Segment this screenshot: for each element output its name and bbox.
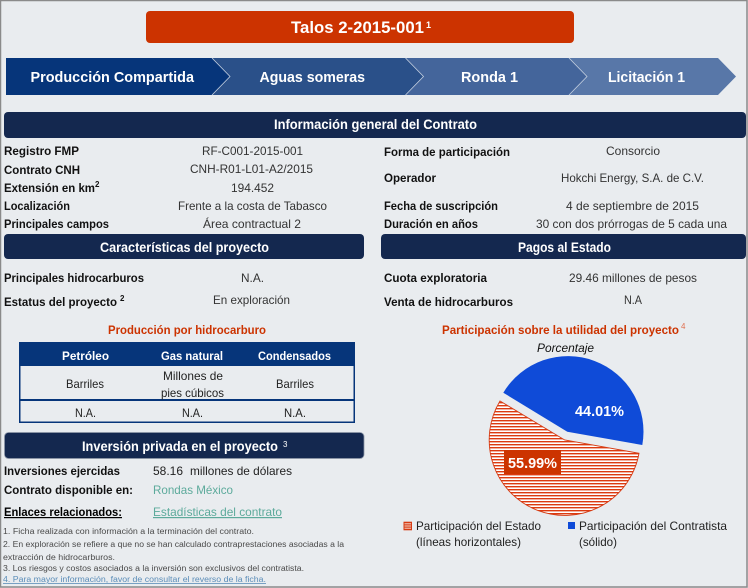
row: Enlaces relacionados: Enlaces relacionados: (4, 505, 122, 519)
chevron: Producción Compartida (6, 58, 230, 95)
legend item: Participación del Contratista: Participación del Contratista (579, 519, 727, 533)
slice: Participación del Contratista 44.01% (503, 356, 643, 445)
heading: Características del proyecto: Características del proyecto (100, 239, 269, 255)
legend item: Participación del Contratista: (sólido) (579, 535, 617, 549)
panel: investment details (4, 464, 292, 519)
legend item: Participación del Contratista (568, 519, 727, 549)
chevron: Ronda 1: Ronda 1 (461, 69, 518, 86)
heading: Información general del Contrato: Información general del Contrato (274, 116, 477, 132)
panel: project characteristics (4, 271, 290, 309)
heading: Producción por hidrocarburo: Producción por hidrocarburo (108, 323, 266, 337)
title (146, 11, 574, 43)
row: Principales hidrocarburos: N.A. (241, 271, 264, 285)
row: Estatus del proyecto: En exploración (213, 293, 290, 307)
table: production by hydrocarbon: N.A. (75, 406, 96, 420)
row: Estatus del proyecto: Estatus del proyecto (4, 295, 117, 309)
title: 1 (426, 20, 431, 30)
label: 55.99%: 55.99% (508, 455, 557, 472)
legend (404, 519, 727, 549)
chevron: Licitación 1: Licitación 1 (608, 69, 685, 86)
row: Operador: Operador (384, 171, 436, 185)
row: Duración en años: 30 con dos prórrogas de 5 cada una (536, 217, 727, 231)
heading: Información general del Contrato (4, 112, 746, 138)
row: Estatus del proyecto: 2 (120, 294, 125, 303)
legend item: Participación del Estado (404, 519, 541, 549)
table: production by hydrocarbon: Millones de (163, 369, 223, 383)
legend item: Participación del Estado: (líneas horizontales) (416, 535, 521, 549)
pie chart (489, 356, 643, 515)
row: Cuota exploratoria: Cuota exploratoria (384, 271, 487, 285)
row: Inversiones ejercidas: Inversiones ejercidas (4, 464, 120, 478)
heading: Inversión privada en el proyecto (4, 432, 364, 458)
row: Extensión en km2: 194.452 (231, 181, 274, 195)
heading: Participación sobre la utilidad del proyecto: 4 (681, 322, 686, 331)
row: Localización: Localización (4, 199, 70, 213)
footnotes: extracción de hidrocarburos. (3, 553, 115, 562)
table: production by hydrocarbon: Barriles (66, 377, 104, 391)
row: Contrato CNH: CNH-R01-L01-A2/2015 (190, 162, 313, 176)
row: Enlaces relacionados: Estadísticas del contrato (153, 505, 282, 519)
label: 44.01%: 44.01% (575, 403, 624, 420)
label: 55.99% (504, 450, 561, 474)
row: Estatus del proyecto (4, 293, 290, 309)
row: Contrato disponible en: Rondas México (153, 483, 233, 497)
panel: state payments (384, 271, 697, 309)
heading: Pagos al Estado (381, 234, 746, 259)
heading: Pagos al Estado: Pagos al Estado (518, 239, 611, 255)
chevron: Producción Compartida: Producción Compartida (30, 69, 195, 86)
footnotes: 4. Para mayor información, favor de consultar el reverso de la ficha. (3, 575, 266, 584)
row: Inversiones ejercidas: millones de dólares (190, 464, 292, 478)
row: Extensión en km2 (4, 180, 274, 195)
chevron: Aguas someras (212, 58, 424, 95)
row: Duración en años (384, 217, 727, 231)
row: Forma de participación: Forma de participación (384, 145, 510, 159)
title: Talos 2-2015-001 (291, 18, 424, 37)
chevron process bar (6, 58, 736, 95)
row: Extensión en km2: 2 (95, 180, 100, 189)
row: Operador: Hokchi Energy, S.A. de C.V. (561, 171, 704, 185)
row: Registro FMP (4, 144, 303, 158)
row: Principales campos (4, 216, 301, 231)
row: Fecha de suscripción (384, 199, 699, 213)
heading: Participación sobre la utilidad del proyecto: Participación sobre la utilidad del proyecto (442, 323, 679, 337)
chevron: Ronda 1 (406, 58, 587, 95)
row: Venta de hidrocarburos: Venta de hidrocarburos (384, 295, 513, 309)
row: Enlaces relacionados (4, 505, 282, 519)
footnotes: 2. En exploración se refiere a que no se han calculado contraprestaciones asociadas a la (3, 540, 345, 549)
table: production by hydrocarbon: pies cúbicos (161, 386, 224, 400)
heading: Características del proyecto (4, 234, 364, 259)
footnotes: 3. Los riesgos y costos asociados a la inversión son exclusivos del contratista. (3, 564, 304, 573)
row: Registro FMP: Registro FMP (4, 144, 79, 158)
heading: Inversión privada en el proyecto: Inversión privada en el proyecto (82, 438, 278, 454)
chevron: Aguas someras: Aguas someras (260, 69, 365, 86)
slice: Participación del Estado 55.99% (489, 401, 639, 515)
chevron: Licitación 1 (569, 58, 736, 95)
chart subtitle: Porcentaje: Porcentaje (537, 341, 594, 355)
row: Inversiones ejercidas: 58.16 (153, 464, 183, 478)
panel: contract info right (384, 144, 727, 231)
row: Fecha de suscripción: Fecha de suscripción (384, 199, 498, 213)
panel: contract info left (4, 144, 327, 231)
row: Contrato disponible en (4, 483, 233, 497)
footnotes (3, 527, 345, 584)
row: Operador (384, 171, 704, 185)
heading: Inversión privada en el proyecto: 3 (283, 440, 288, 449)
row: Inversiones ejercidas (4, 464, 292, 478)
table: production by hydrocarbon: Petróleo (62, 349, 109, 363)
table: production by hydrocarbon: Gas natural (161, 349, 223, 363)
row: Venta de hidrocarburos (384, 293, 642, 309)
row: Registro FMP: RF-C001-2015-001 (202, 144, 303, 158)
row: Contrato CNH (4, 162, 313, 177)
row: Principales campos: Área contractual 2 (203, 216, 301, 231)
table: production by hydrocarbon: N.A. (284, 406, 306, 420)
row: Forma de participación: Consorcio (606, 144, 660, 158)
row: Principales hidrocarburos (4, 271, 264, 285)
row: Cuota exploratoria: 29.46 millones de pesos (569, 271, 697, 285)
row: Extensión en km2: Extensión en km (4, 181, 95, 195)
row: Venta de hidrocarburos: N.A (624, 293, 642, 307)
row: Forma de participación (384, 144, 660, 159)
row: Contrato CNH: Contrato CNH (4, 163, 80, 177)
legend item: Participación del Estado: Participación del Estado (416, 519, 541, 533)
row: Localización: Frente a la costa de Tabasco (178, 199, 327, 213)
row: Cuota exploratoria (384, 271, 697, 285)
table: production by hydrocarbon (19, 342, 355, 422)
table: production by hydrocarbon: N.A. (182, 406, 203, 420)
row: Principales campos: Principales campos (4, 217, 109, 231)
table: production by hydrocarbon: Condensados (258, 349, 331, 363)
row: Principales hidrocarburos: Principales hidrocarburos (4, 271, 144, 285)
row: Duración en años: Duración en años (384, 217, 478, 231)
footnotes: 1. Ficha realizada con información a la terminación del contrato. (3, 527, 254, 536)
row: Contrato disponible en: Contrato disponible en: (4, 483, 133, 497)
row: Localización (4, 199, 327, 213)
row: Fecha de suscripción: 4 de septiembre de 2015 (566, 199, 699, 213)
table: production by hydrocarbon: Barriles (276, 377, 314, 391)
